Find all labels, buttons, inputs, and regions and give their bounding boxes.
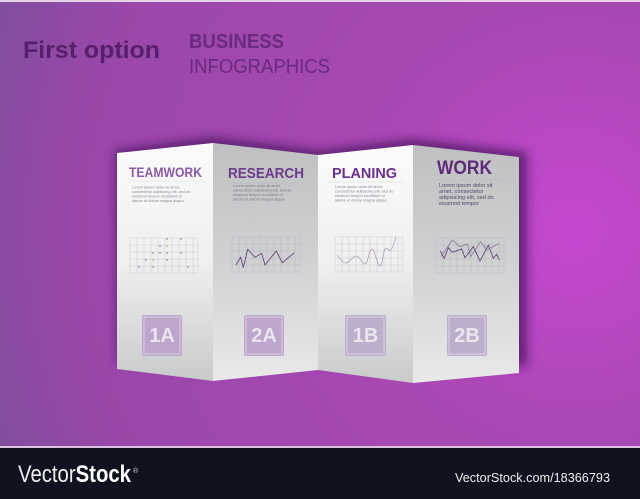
chart: two lines <box>436 238 504 273</box>
text block: research: eiusmod tempor incididunt ut <box>233 192 284 197</box>
logo: VectorStock <box>18 461 132 488</box>
text block: work: Lorem ipsum dolor sit <box>439 183 493 189</box>
text block: research: consectetur adipiscing elit, sed do <box>233 188 291 192</box>
text block: teamwork: consectetur adipiscing elit, sed do <box>132 189 190 194</box>
text block: teamwork: labore et dolore magna aliqua <box>132 198 184 203</box>
text block: research: Lorem ipsum dolor sit amet, <box>233 183 281 188</box>
text block: planing: Lorem ipsum dolor sit amet, <box>335 184 383 189</box>
text block: planing: consectetur adipiscing elit, sed do <box>335 188 393 194</box>
text block: planing <box>335 184 393 202</box>
badge: 1B: 1B <box>353 325 378 347</box>
heading: teamwork: TEAMWORK <box>129 164 202 180</box>
brochure shadow <box>115 137 527 372</box>
text block: planing: eiusmod tempor incididunt ut <box>335 193 386 198</box>
heading: work: WORK <box>437 158 492 179</box>
text block: teamwork: Lorem ipsum dolor sit amet, <box>132 184 180 190</box>
heading: research: RESEARCH <box>228 165 304 182</box>
panel: research <box>213 143 318 381</box>
footer bar <box>0 448 640 499</box>
badge: 1B <box>345 315 386 356</box>
chart: smooth line <box>335 237 403 272</box>
text block: teamwork: eiusmod tempor incididunt ut <box>132 194 183 198</box>
subtitle: BUSINESS <box>189 31 284 53</box>
text block: work: adipisicing elit, sed do <box>439 195 494 201</box>
chart: line <box>232 237 300 272</box>
brochure <box>117 143 519 383</box>
text block: work <box>439 183 494 207</box>
badge: 2B <box>447 315 487 356</box>
text block: planing: labore et dolore magna aliqua <box>335 198 387 202</box>
image id: VectorStock.com/18366793 <box>455 470 610 485</box>
badge: 2A: 2A <box>251 325 277 347</box>
panel: teamwork <box>117 143 213 381</box>
registered mark: ® <box>133 467 139 475</box>
badge: 2A <box>244 315 284 356</box>
badge: 1A <box>142 315 182 356</box>
badge: 2B: 2B <box>454 325 480 347</box>
panel: work <box>413 145 519 383</box>
chart: dot plot <box>130 238 198 273</box>
text block: work: amet, consectetur <box>439 189 484 195</box>
text block: work: eiusmod tempor <box>439 201 479 207</box>
subtitle <box>189 31 330 78</box>
text block: teamwork <box>132 184 190 203</box>
badge: 1A: 1A <box>149 325 175 347</box>
panel: planing <box>318 145 413 383</box>
title: First option <box>23 37 160 64</box>
text block: research <box>233 183 291 202</box>
subtitle: INFOGRAPHICS <box>189 56 330 78</box>
heading: planing: PLANING <box>332 165 397 182</box>
text block: research: labore et dolore magna aliqua <box>233 196 285 202</box>
